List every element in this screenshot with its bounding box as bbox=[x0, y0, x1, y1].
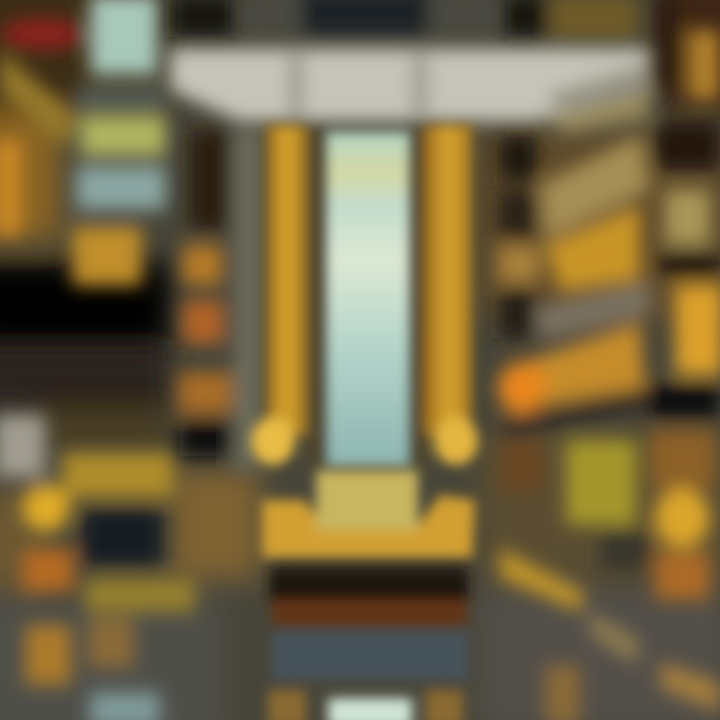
left details bbox=[0, 0, 195, 720]
left wall bbox=[0, 0, 260, 720]
right details bbox=[498, 0, 720, 720]
dark base below table bbox=[268, 568, 468, 720]
right wall bbox=[480, 0, 720, 720]
gold columns bbox=[251, 125, 478, 470]
top dark lintel bbox=[240, 0, 500, 37]
central light column bbox=[326, 132, 410, 467]
inner left column bbox=[172, 0, 262, 470]
gold table bbox=[262, 470, 475, 558]
white frieze band bbox=[170, 48, 650, 122]
